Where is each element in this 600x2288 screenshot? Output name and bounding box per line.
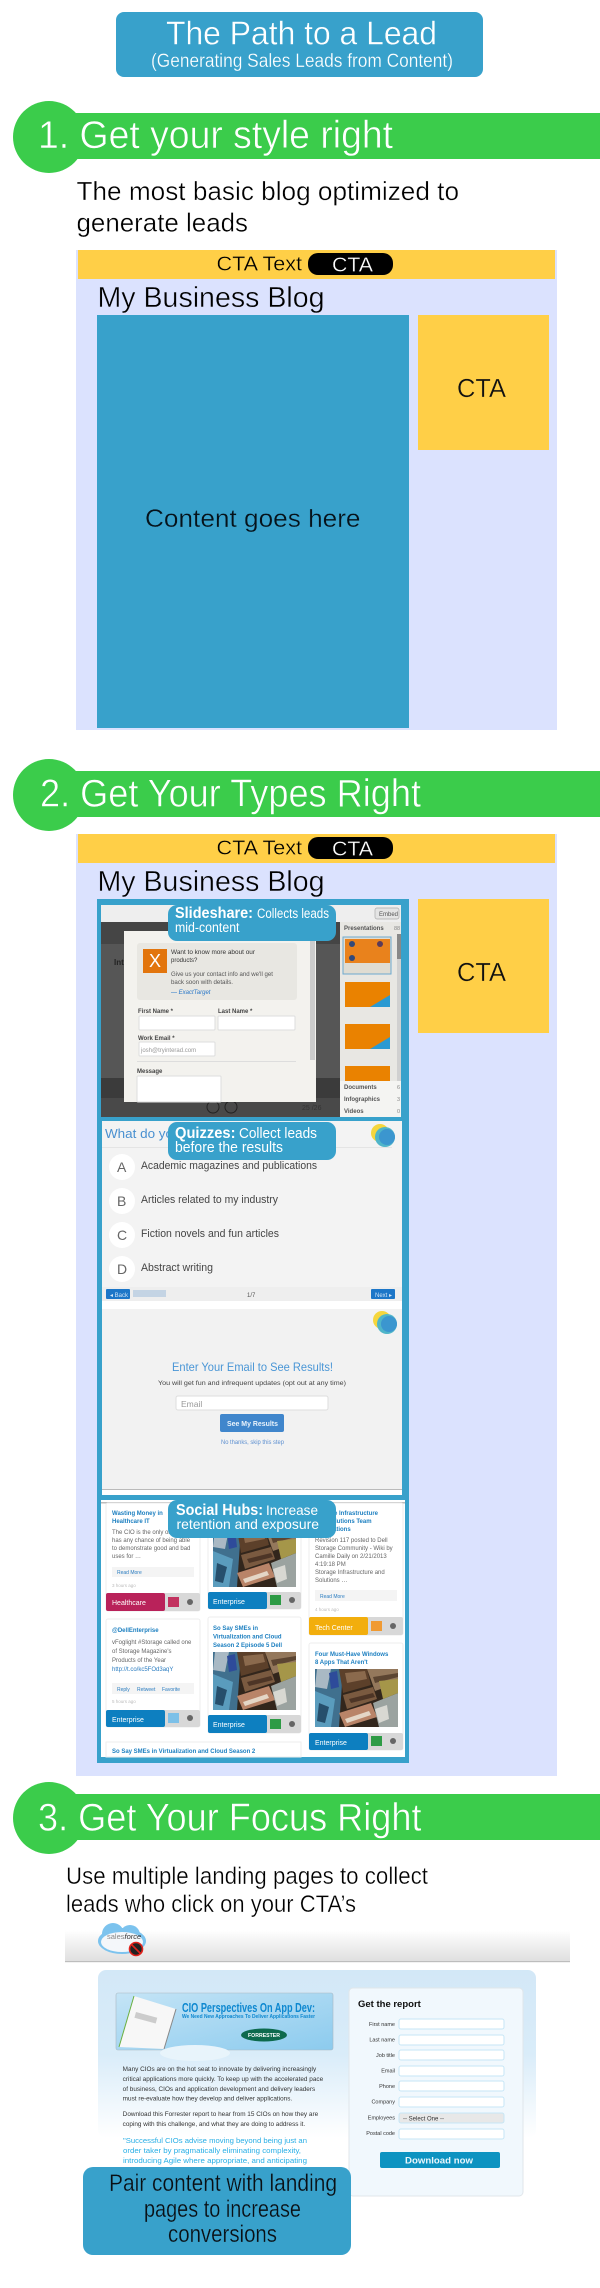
quiz screenshot: 1/7 xyxy=(247,1293,256,1299)
sidebar CTA: CTA xyxy=(457,373,507,403)
landing page screenshot xyxy=(65,1923,570,2196)
landing page background xyxy=(98,1970,536,2138)
card: windows apps: Four Must-Have Windows xyxy=(315,1652,389,1658)
card: healthcare xyxy=(106,1503,200,1611)
sidebar CTA xyxy=(418,315,549,450)
social hub screenshot xyxy=(101,1500,405,1757)
body copy: critical applications more quickly. To keep up with the accelerated pace xyxy=(123,2076,324,2083)
form: get the report: -- Select One -- xyxy=(403,2116,444,2122)
quote: "Successful CIOs advise moving beyond being just an xyxy=(123,2136,307,2145)
lead capture form: Message xyxy=(137,1069,163,1075)
form: get the report: Company xyxy=(371,2100,395,2106)
content block: Content goes here xyxy=(145,505,360,533)
quiz email gate screenshot: You will get fun and infrequent updates (opt out at any time) xyxy=(158,1380,346,1387)
section 1 intro text: generate leads xyxy=(76,208,248,238)
banner xyxy=(116,1993,333,2061)
section 1 heading: 1. Get your style right xyxy=(38,114,393,157)
card: SMEs: Season 2 Episode 5 Dell xyxy=(213,1643,282,1649)
section 3 intro text: Use multiple landing pages to collect xyxy=(66,1863,428,1890)
quiz email gate screenshot: Email xyxy=(181,1399,202,1409)
quote xyxy=(123,2136,307,2165)
body copy: Download this Forrester report to hear from 15 CIOs on how they are xyxy=(123,2111,319,2118)
form: get the report: Job title xyxy=(376,2053,395,2059)
lead capture form xyxy=(124,931,316,1102)
body copy: of business, CIOs and application development and delivery leaders xyxy=(123,2086,315,2093)
card: healthcare: Read More xyxy=(117,1570,142,1576)
quiz screenshot: A xyxy=(117,1159,127,1175)
callout: social hubs: Increase xyxy=(266,1502,318,1518)
callout: quizzes xyxy=(168,1122,336,1160)
card: twitter: vFoglight #Storage called one xyxy=(112,1640,192,1646)
quiz screenshot: Articles related to my industry xyxy=(141,1194,278,1206)
lead capture form: X xyxy=(149,951,161,971)
banner: We Need New Approaches To Deliver Applications Faster xyxy=(182,2014,316,2020)
callout: slideshare: Collects leads xyxy=(257,906,329,921)
lead capture form: products? xyxy=(171,958,198,964)
section 3 intro text xyxy=(66,1863,428,1918)
CTA bar: CTA xyxy=(332,839,374,861)
section 3 heading: 3. Get Your Focus Right xyxy=(38,1797,422,1840)
card: SMEs: Virtualization and Cloud xyxy=(213,1634,282,1640)
form: get the report xyxy=(349,1988,523,2196)
quiz email gate screenshot xyxy=(102,1309,402,1495)
callout: pair content: pages to increase xyxy=(144,2196,301,2223)
callout: slideshare xyxy=(168,905,336,941)
body copy: must re-evaluate how they develop and deliver applications. xyxy=(123,2096,292,2103)
section 2 heading xyxy=(13,759,600,831)
callout: slideshare: Slideshare: xyxy=(175,905,253,922)
form: get the report: Email xyxy=(381,2068,395,2074)
quote: introducing Agile where appropriate, and anticipating xyxy=(123,2156,307,2165)
form: get the report: Phone xyxy=(379,2084,395,2090)
quiz screenshot xyxy=(102,1121,402,1309)
card: tech center: Publications xyxy=(315,1527,351,1533)
lead capture form: Want to know more about our xyxy=(171,950,255,956)
card: twitter: Enterprise xyxy=(112,1717,144,1724)
slideshare screenshot: 3 xyxy=(397,1097,400,1103)
banner: CIO Perspectives On App Dev: xyxy=(182,2000,315,2015)
card: twitter: Reply xyxy=(117,1687,130,1693)
callout: social hubs: retention and exposure xyxy=(176,1516,319,1532)
card: healthcare: Healthcare IT xyxy=(112,1519,150,1525)
title: The Path to a Lead xyxy=(166,14,437,52)
slideshare screenshot: Documents xyxy=(344,1085,377,1091)
callout: quizzes: Collect leads xyxy=(239,1126,317,1142)
slideshare screenshot: Videos xyxy=(344,1109,364,1115)
card: tech center xyxy=(309,1503,403,1635)
lead capture form: back soon with details. xyxy=(171,980,233,986)
card: twitter xyxy=(106,1619,200,1727)
callout: quizzes: Quizzes: xyxy=(175,1125,236,1142)
card: windows apps: 8 Apps That Aren't xyxy=(315,1660,368,1666)
quiz screenshot: D xyxy=(117,1261,127,1277)
quiz email gate screenshot: No thanks, skip this step xyxy=(221,1440,285,1446)
card: twitter: Products of the Year xyxy=(112,1658,166,1664)
form: get the report: Download now xyxy=(405,2156,474,2166)
slideshare screenshot: 25 /26 xyxy=(302,1105,322,1112)
card: season 2 xyxy=(106,1742,301,1757)
quiz screenshot: Academic magazines and publications xyxy=(141,1160,317,1172)
card: healthcare: to demonstrate good and bad xyxy=(112,1546,190,1552)
panel: blog with content types xyxy=(76,834,557,1776)
body copy xyxy=(123,2066,324,2128)
lead capture form: Give us your contact info and we'll get xyxy=(171,972,273,978)
card: SMEs: So Say SMEs in xyxy=(213,1626,258,1632)
slideshare screenshot: 88 xyxy=(394,926,400,932)
blog title: My Business Blog xyxy=(98,282,324,314)
section 2 heading: 2. Get Your Types Right xyxy=(40,773,421,816)
slideshare screenshot: Presentations xyxy=(344,926,384,932)
section 1 intro text xyxy=(76,176,459,238)
card: tech center: Storage Community - Wiki by xyxy=(315,1546,393,1552)
card: twitter: Retweet xyxy=(137,1687,156,1693)
lead capture form: — ExactTarget xyxy=(170,990,211,996)
title xyxy=(116,12,483,77)
panel: basic blog mockup xyxy=(76,250,557,730)
card: healthcare: Wasting Money in xyxy=(112,1511,163,1517)
card: tech center: Storage Infrastructure xyxy=(315,1511,379,1517)
section 1 heading xyxy=(13,101,600,173)
card: healthcare: Healthcare xyxy=(112,1600,146,1607)
card: windows apps xyxy=(309,1643,403,1750)
section 1 intro text: The most basic blog optimized to xyxy=(76,176,459,206)
CTA bar xyxy=(78,834,555,863)
slideshare screenshot: 6 xyxy=(397,1085,400,1091)
slideshare screenshot: Int xyxy=(114,958,124,967)
sidebar CTA xyxy=(418,899,549,1033)
callout: pair content: conversions xyxy=(168,2221,277,2248)
section 3 intro text: leads who click on your CTA’s xyxy=(66,1891,356,1918)
icon: chat bubble logo xyxy=(371,1124,395,1147)
body copy: Many CIOs are on the hot seat to innovate by delivering increasingly xyxy=(123,2066,317,2073)
card: tech center: Solutions … xyxy=(315,1578,347,1584)
callout: social hubs xyxy=(168,1500,336,1538)
form: get the report: Employees xyxy=(368,2116,395,2122)
sidebar CTA: CTA xyxy=(457,957,507,987)
card: tech center: 4:19:18 PM xyxy=(315,1562,346,1568)
card: healthcare: 3 hours ago xyxy=(112,1583,136,1588)
card: SMEs: Enterprise xyxy=(213,1722,245,1729)
content block xyxy=(97,315,409,728)
card: twitter: http://t.co/kc5FOd3aqY xyxy=(112,1667,173,1673)
title: (Generating Sales Leads from Content) xyxy=(151,51,453,72)
quiz screenshot: Fiction novels and fun articles xyxy=(141,1228,279,1240)
card: twitter: @DellEnterprise xyxy=(112,1628,159,1634)
lead capture form: josh@tryinterad.com xyxy=(140,1048,196,1054)
slideshare screenshot: Embed xyxy=(379,912,398,918)
banner: FORRESTER xyxy=(248,2033,280,2039)
quote: order taker by pragmatically eliminating complexity, xyxy=(123,2146,301,2155)
card: season 2: So Say SMEs in Virtualization and Cloud Season 2 xyxy=(112,1749,256,1755)
quiz screenshot: ◂ Back xyxy=(110,1293,129,1299)
quiz screenshot: What do yo xyxy=(105,1126,173,1141)
quiz screenshot: Next ▸ xyxy=(375,1293,392,1299)
CTA bar: CTA Text xyxy=(216,254,302,276)
card: tech center: Camille Daily on 2/21/2013 xyxy=(315,1554,387,1560)
card: enterprise with photo: Enterprise xyxy=(213,1599,245,1606)
card: twitter: of Storage Magazine's xyxy=(112,1649,172,1655)
card: tech center: Revision 117 posted to Dell xyxy=(315,1538,388,1544)
card: tech center: Storage Infrastructure and xyxy=(315,1570,385,1576)
form: get the report: Last name xyxy=(369,2038,395,2044)
callout: quizzes: before the results xyxy=(175,1140,283,1156)
icon: chat bubble logo xyxy=(373,1311,397,1334)
icon: salesforce logo xyxy=(98,1923,146,1956)
callout: social hubs: Social Hubs: xyxy=(176,1502,263,1519)
lead capture form: Work Email * xyxy=(138,1036,175,1042)
quiz screenshot: B xyxy=(117,1193,126,1209)
quiz screenshot: Abstract writing xyxy=(141,1262,213,1274)
form: get the report: Postal code xyxy=(366,2131,395,2137)
quiz email gate screenshot: See My Results xyxy=(227,1419,278,1428)
callout: pair content: Pair content with landing xyxy=(109,2170,337,2197)
card: tech center: 4 hours ago xyxy=(315,1607,339,1612)
card: twitter: Favorite xyxy=(162,1687,180,1693)
callout: pair content xyxy=(83,2167,351,2255)
CTA bar: CTA xyxy=(332,255,374,277)
card: tech center: Tech Center xyxy=(315,1625,353,1632)
callout: slideshare: mid-content xyxy=(175,920,240,935)
lead capture form: Last Name * xyxy=(218,1009,253,1015)
card: twitter: 5 hours ago xyxy=(112,1699,136,1704)
content frame xyxy=(97,899,409,1763)
body copy: coping with this challenge, and what they are doing to address it. xyxy=(123,2121,305,2128)
card: healthcare: has any chance of being able xyxy=(112,1538,191,1544)
card: SMEs xyxy=(208,1617,301,1733)
card: tech center: and Solutions Team xyxy=(315,1519,372,1525)
card: tech center: Read More xyxy=(320,1594,345,1600)
CTA bar xyxy=(78,250,555,279)
section 3 heading xyxy=(13,1782,600,1854)
slideshare screenshot xyxy=(101,905,401,1117)
card: windows apps: Enterprise xyxy=(315,1740,347,1747)
form: get the report: Get the report xyxy=(358,1999,422,2010)
icon: salesforce logo: salesforce xyxy=(107,1932,141,1941)
slideshare screenshot: 0 xyxy=(397,1109,400,1115)
quiz screenshot: C xyxy=(117,1227,127,1243)
quiz email gate screenshot: Enter Your Email to See Results! xyxy=(172,1360,333,1374)
card: healthcare: uses for … xyxy=(112,1554,141,1560)
form: get the report: First name xyxy=(369,2022,395,2028)
slideshare screenshot: Infographics xyxy=(344,1097,381,1103)
lead capture form: First Name * xyxy=(138,1009,174,1015)
CTA bar: CTA Text xyxy=(216,838,302,860)
card: healthcare: The CIO is the only one who xyxy=(112,1530,188,1536)
card: enterprise with photo xyxy=(208,1503,301,1609)
blog title: My Business Blog xyxy=(98,866,324,898)
